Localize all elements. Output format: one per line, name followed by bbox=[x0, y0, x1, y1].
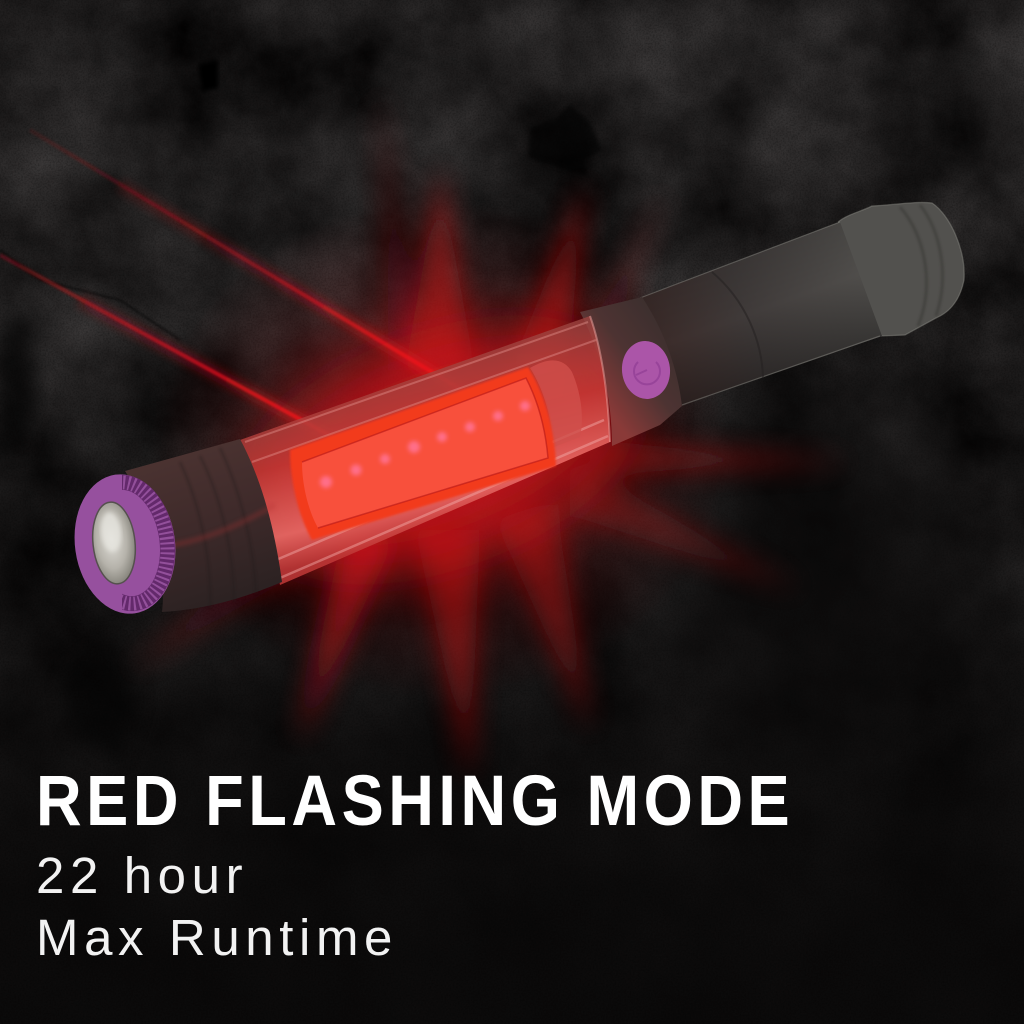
switch collar bbox=[580, 297, 682, 446]
reflector end bbox=[530, 360, 582, 447]
purple bezel bbox=[74, 474, 176, 614]
subheading: runtime: 22 hour bbox=[36, 847, 248, 904]
rear handle bbox=[640, 222, 882, 405]
subheading: runtime bbox=[36, 847, 398, 966]
subheading: runtime: Max Runtime bbox=[36, 909, 398, 966]
head body bbox=[125, 439, 282, 612]
flashlight illustration with background bbox=[0, 0, 1024, 792]
flashlight lens bbox=[89, 500, 139, 586]
heading: RED FLASHING MODE bbox=[36, 762, 794, 841]
red glow and light rays bbox=[0, 90, 850, 780]
flashlight bbox=[66, 202, 964, 620]
tail cap bbox=[838, 202, 964, 336]
icon: purple power button bbox=[619, 339, 673, 401]
clear lens housing bbox=[240, 316, 610, 585]
red LED panel bbox=[290, 367, 556, 540]
